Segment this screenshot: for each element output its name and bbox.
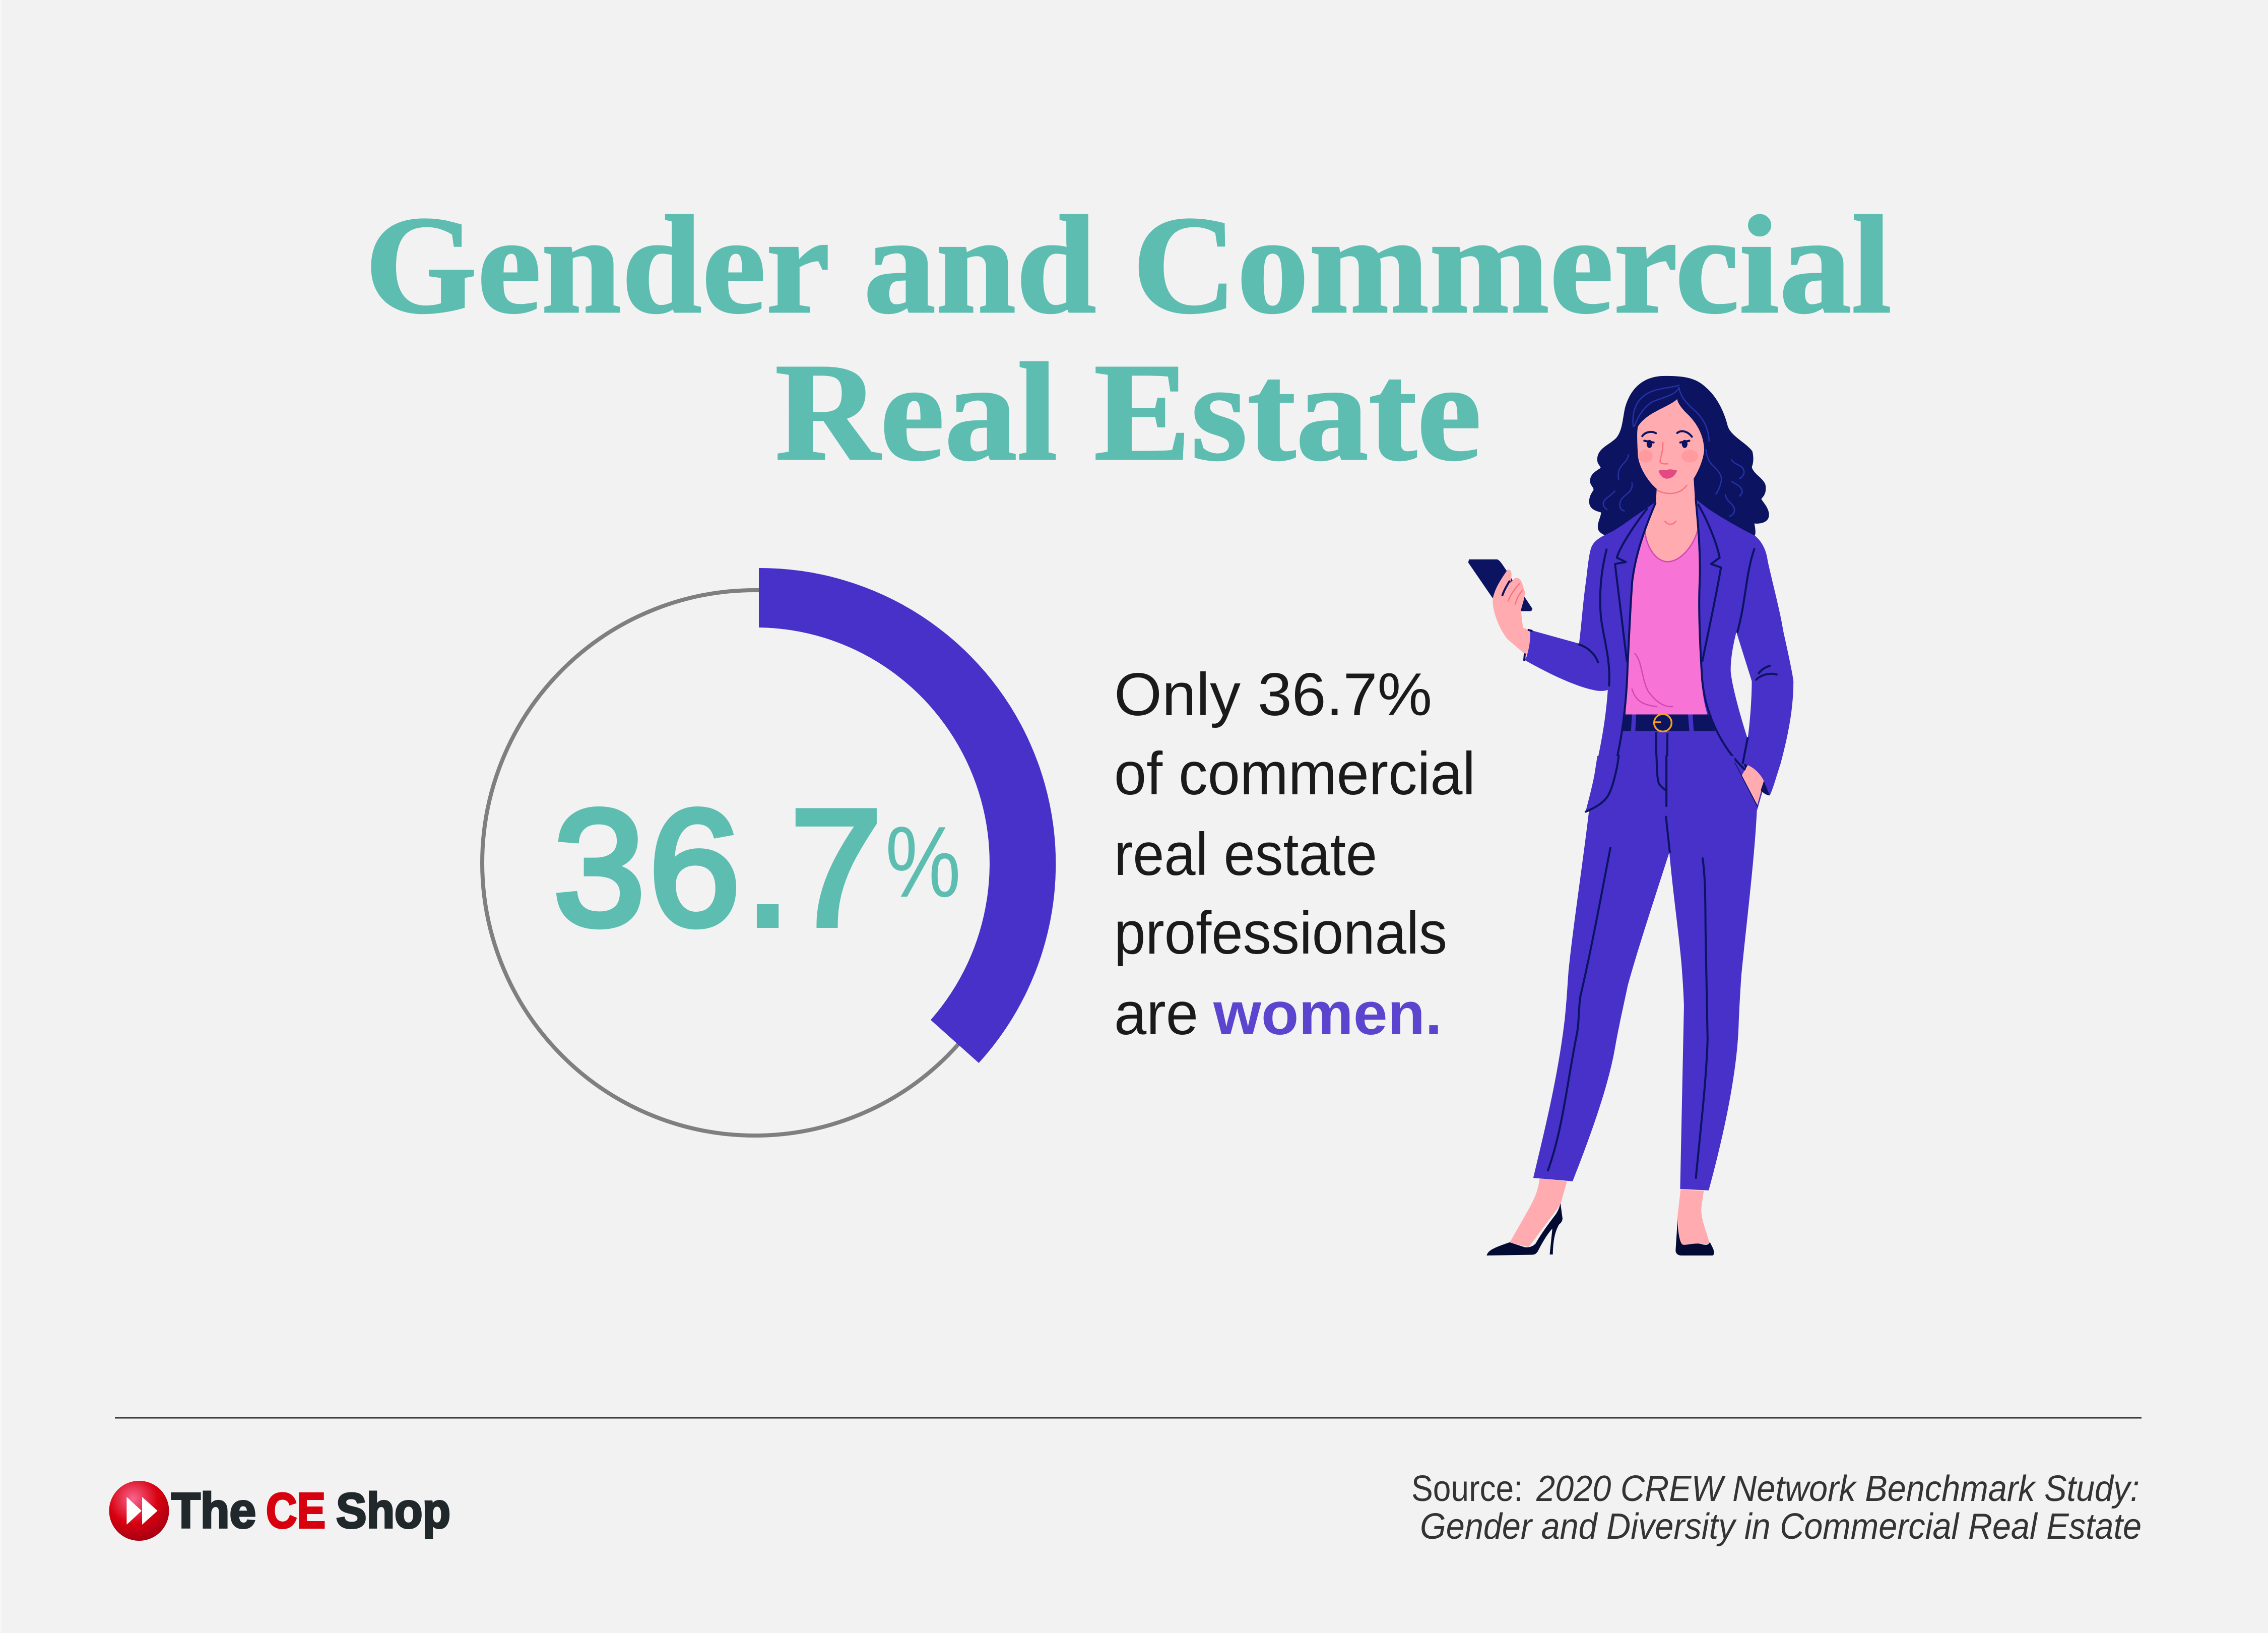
statement text: real estate: [1114, 821, 1377, 888]
left high heel: [1486, 1203, 1563, 1255]
trousers: [1533, 756, 1757, 1190]
right ankle: [1677, 1189, 1710, 1245]
donut chart: 36.7%: [482, 568, 1056, 1136]
statement text: are: [1114, 980, 1198, 1047]
hair strands: [1603, 385, 1744, 516]
source citation: Gender and Diversity in Commercial Real Estate: [1420, 1506, 2142, 1547]
statement text: [1114, 661, 1475, 1047]
face and neck: [1637, 399, 1704, 566]
statement text: Only 36.7%: [1114, 661, 1432, 728]
title: Real Estate: [775, 335, 1481, 490]
upper body: [1468, 376, 1793, 811]
big number: 36.7: [553, 775, 882, 960]
jacket seam lines: [1524, 499, 1777, 806]
icon: phone: [1468, 559, 1532, 611]
belt: [1623, 714, 1715, 731]
neckline and top folds: [1632, 530, 1698, 707]
logo icon: [109, 1481, 169, 1541]
percent sign: %: [885, 806, 961, 918]
gap between arm and body: [1731, 632, 1752, 739]
lower body: [1486, 756, 1757, 1255]
statement text: professionals: [1114, 899, 1447, 967]
jacket and sleeves: [1525, 499, 1793, 811]
statement text: of commercial: [1114, 740, 1475, 807]
chart value arc: [759, 568, 1056, 1063]
logo: The CE Shop: [109, 1481, 450, 1541]
right high heel: [1675, 1214, 1714, 1255]
source citation: 2020 CREW Network Benchmark Study:: [1536, 1469, 2140, 1509]
left ankle: [1510, 1178, 1567, 1247]
chart track ring: [482, 590, 1027, 1136]
top: [1626, 530, 1707, 715]
finger lines: [1503, 581, 1522, 604]
statement text: women.: [1213, 980, 1442, 1047]
raised hand: [1493, 570, 1530, 656]
title: [365, 187, 1892, 490]
trouser creases: [1548, 756, 1708, 1178]
footer divider: [115, 1417, 2142, 1418]
illustration: businesswoman with phone: [1468, 376, 1793, 1255]
source citation: [1411, 1469, 2142, 1547]
source citation: Source:: [1411, 1469, 1523, 1509]
hair: [1589, 376, 1769, 536]
title: Gender and Commercial: [365, 187, 1892, 343]
logo wordmark: Shop: [336, 1483, 450, 1538]
logo wordmark: CE: [266, 1483, 326, 1538]
logo wordmark: The: [171, 1483, 256, 1538]
logo wordmark: [171, 1483, 450, 1538]
hand in pocket: [1741, 764, 1770, 806]
face details: [1639, 431, 1698, 524]
